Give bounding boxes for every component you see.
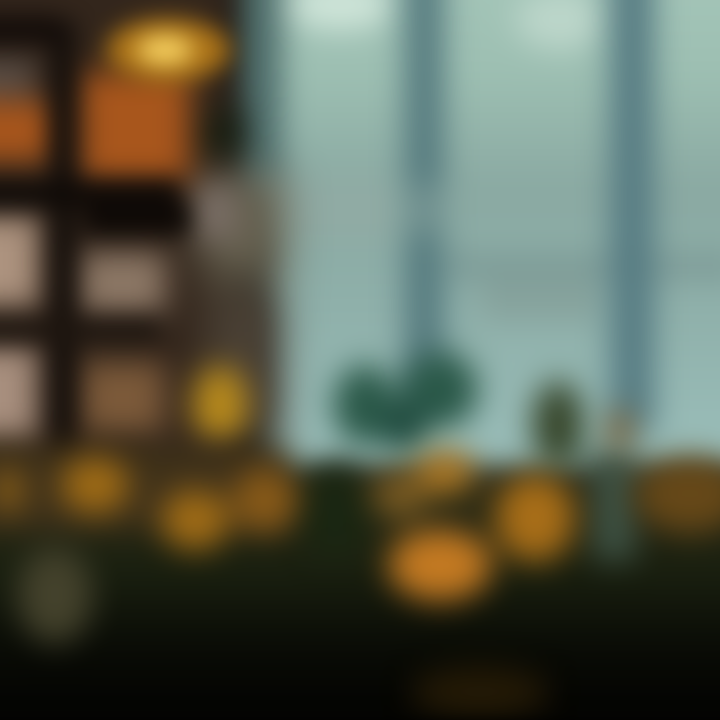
shelf frames <box>0 15 190 510</box>
left shelving <box>0 0 245 470</box>
window mullions <box>404 0 654 430</box>
tan shelf edge <box>200 175 285 440</box>
shelf contents <box>0 60 248 445</box>
orange foreground blobs <box>0 408 720 718</box>
pendant lamp <box>106 18 230 82</box>
plants <box>299 352 636 560</box>
floor and foreground <box>0 445 720 720</box>
window area <box>232 0 720 480</box>
